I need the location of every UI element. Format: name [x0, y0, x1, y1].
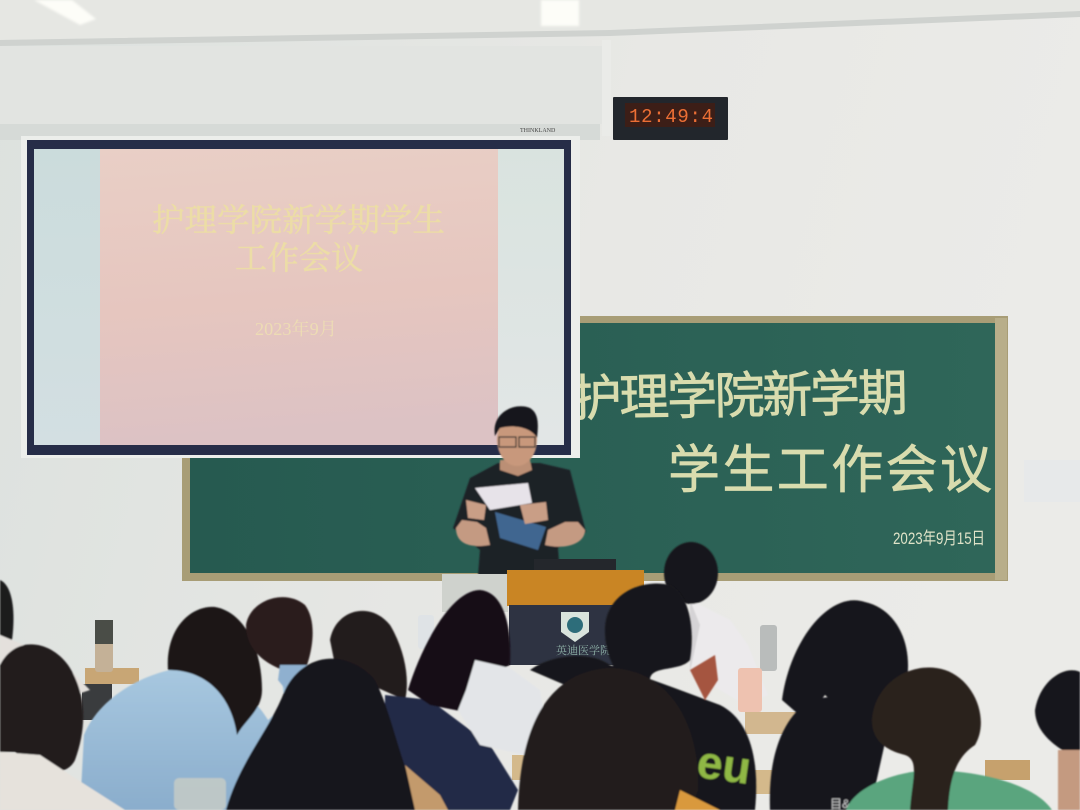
projector screen	[21, 136, 580, 458]
student white shirt back row right	[664, 542, 768, 705]
slide title: 护理学院新学期学生	[152, 202, 445, 238]
chalk title: 学生工作会议	[668, 442, 992, 500]
projector screen: 工作会议	[235, 240, 363, 276]
lectern	[442, 559, 644, 665]
student: navy jacket	[330, 611, 407, 700]
student: curly hair right edge	[1035, 670, 1080, 760]
digital clock	[613, 97, 728, 140]
desks and bottles	[82, 615, 1030, 794]
chalk title	[571, 365, 992, 500]
cup	[174, 778, 226, 810]
projector screen housing	[0, 40, 611, 140]
student: green shirt with ponytail	[846, 770, 1052, 810]
students	[0, 580, 1080, 810]
student: long hair centre front	[226, 659, 425, 810]
student: left front with bun	[0, 644, 83, 771]
far left student edge	[0, 580, 14, 650]
chalkboard	[182, 316, 1008, 581]
chalk title: 护理学院新学期	[571, 365, 908, 427]
speaker	[453, 406, 586, 575]
chalk date: 2023年9月15日	[893, 529, 985, 548]
student: short hair centre foreground	[518, 668, 698, 810]
digital clock: 12:49:4	[629, 106, 713, 128]
student: blue hoodie	[80, 665, 305, 810]
student: long hair white shirt	[408, 590, 510, 712]
ceiling	[0, 0, 1080, 46]
slide date: 2023年9月	[255, 318, 337, 339]
student: dark hair behind	[246, 597, 313, 680]
wall notice	[1024, 460, 1080, 502]
student: black jacket right	[770, 696, 890, 810]
students: eu	[694, 735, 754, 794]
student: ponytail green print	[605, 583, 692, 680]
projector screen housing: THINKLAND	[520, 128, 556, 134]
lectern: 英迪医学院	[556, 643, 611, 657]
